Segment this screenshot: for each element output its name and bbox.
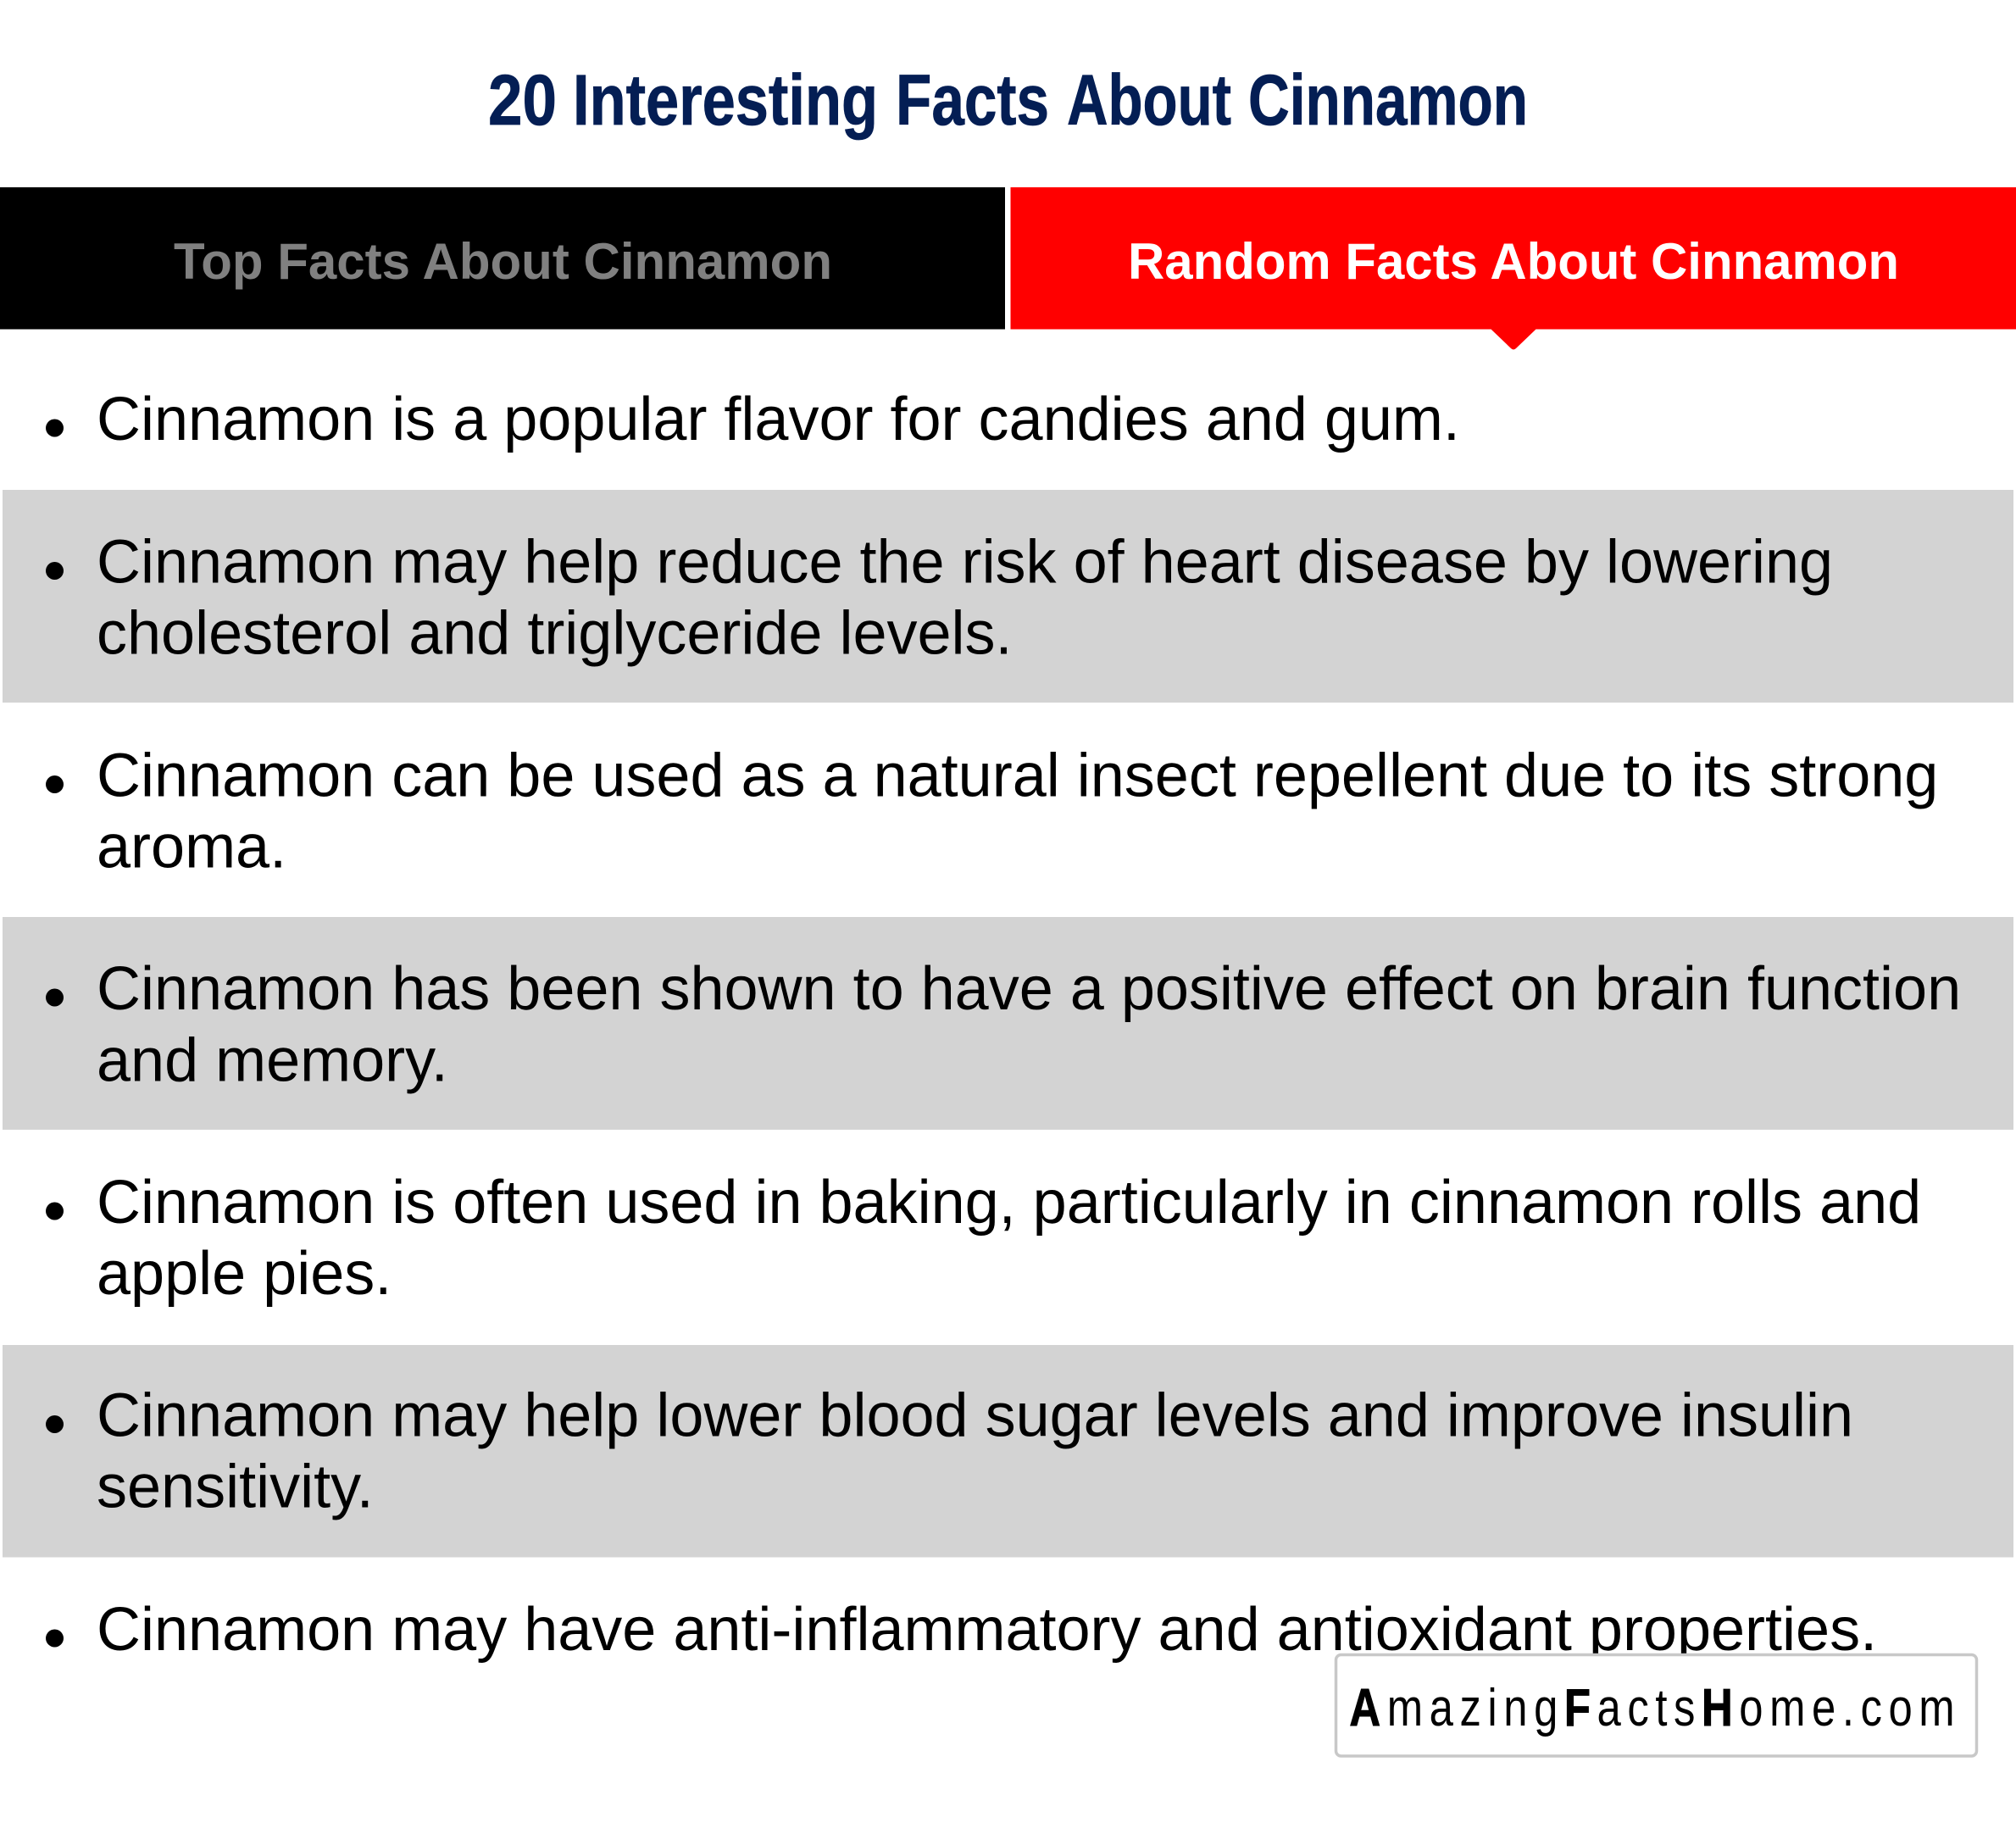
- title: 20: [488, 60, 557, 140]
- fact row 2: [3, 490, 2013, 703]
- fact row 3: Cinnamon can be used as a natural insect repellent due to its strong: [97, 742, 1938, 810]
- tab: top facts (inactive): [0, 187, 1005, 329]
- tab label: top facts: Top Facts About Cinnamon: [174, 233, 832, 290]
- fact row 5: apple pies.: [97, 1240, 392, 1308]
- title: Interesting: [573, 60, 878, 140]
- watermark badge: [1336, 1654, 1976, 1756]
- fact row 3: aroma.: [97, 814, 286, 881]
- tab label: random facts: Random Facts About Cinnamon: [1128, 233, 1899, 290]
- watermark text: AmazingFactsHome.com: [1349, 1679, 1955, 1737]
- fact row 5: Cinnamon is often used in baking, particularly in cinnamon rolls and: [97, 1169, 1921, 1237]
- tab pointer arrow: [1491, 329, 1536, 349]
- fact row 4: and memory.: [97, 1027, 448, 1095]
- fact row 6: sensitivity.: [97, 1453, 374, 1520]
- title: About: [1067, 60, 1231, 140]
- fact row 2: cholesterol and triglyceride levels.: [97, 600, 1013, 668]
- fact row 4: [3, 917, 2013, 1130]
- fact row 2: Cinnamon may help reduce the risk of heart disease by lowering: [97, 529, 1833, 597]
- title: Facts: [896, 60, 1049, 140]
- fact row 4: Cinnamon has been shown to have a positive effect on brain function: [97, 955, 1961, 1023]
- fact row 6: [3, 1345, 2013, 1558]
- fact row 5: [46, 1169, 1921, 1308]
- title: [488, 60, 1528, 140]
- fact row 7: Cinnamon may have anti-inflammatory and antioxidant properties.: [97, 1596, 1877, 1664]
- title: Cinnamon: [1248, 60, 1528, 140]
- fact row 6: Cinnamon may help lower blood sugar levels and improve insulin: [97, 1381, 1853, 1449]
- fact row 3: [46, 742, 1938, 881]
- tab: random facts (active): [1010, 187, 2016, 349]
- fact row 1: Cinnamon is a popular flavor for candies and gum.: [97, 386, 1460, 453]
